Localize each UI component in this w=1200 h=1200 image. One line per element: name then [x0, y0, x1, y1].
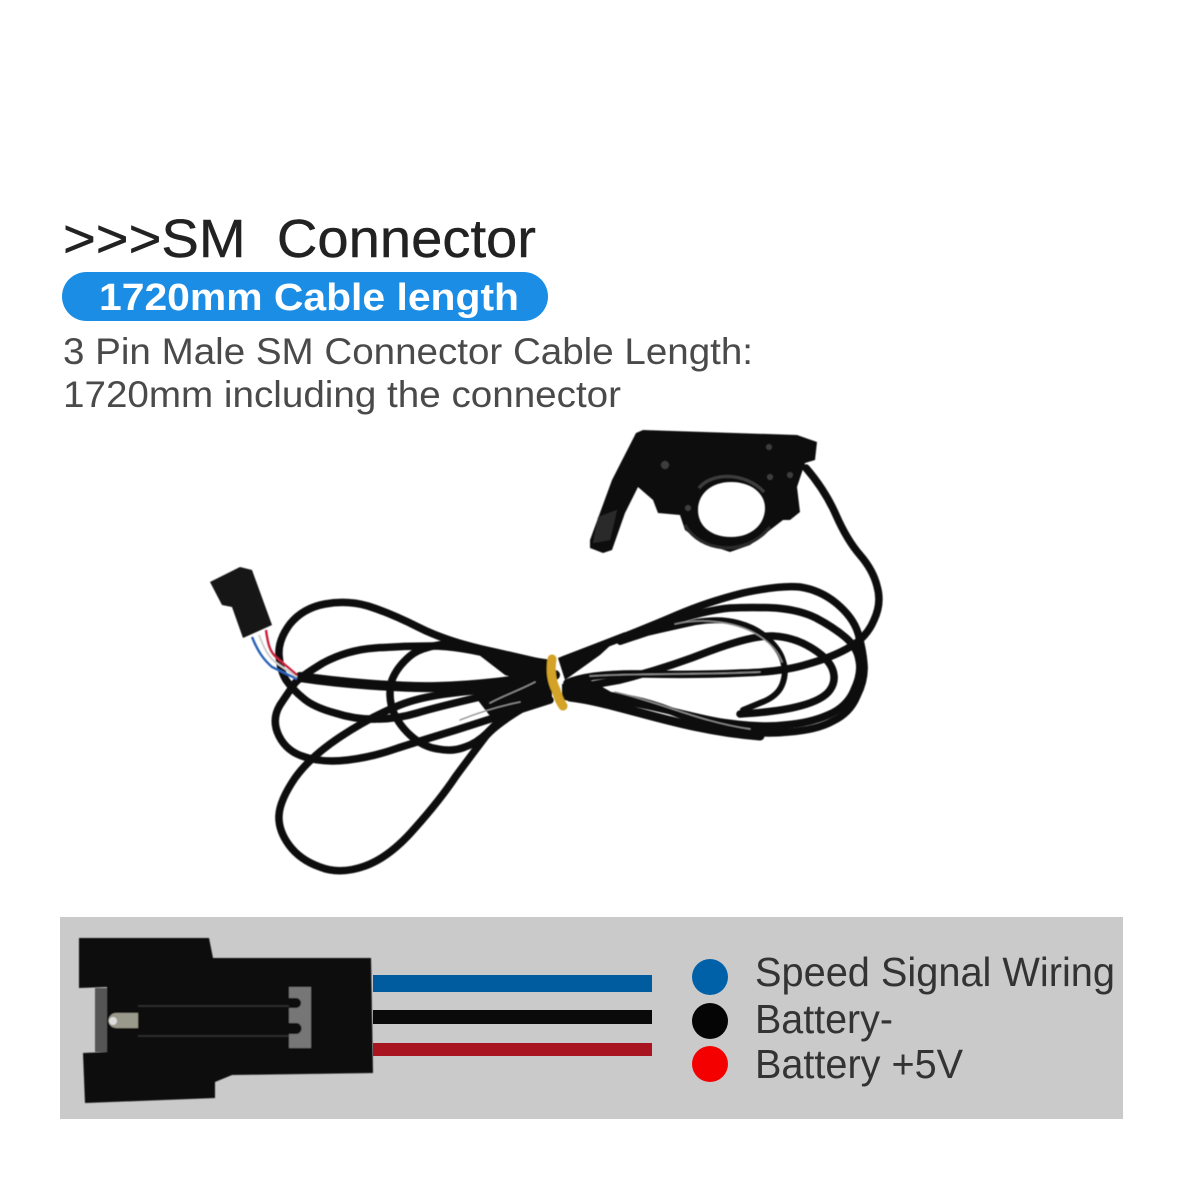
legend: Battery +5V	[755, 1041, 964, 1087]
product photo: throttle with coiled cable	[210, 430, 879, 871]
throttle body	[590, 430, 817, 553]
legend	[692, 949, 1115, 1087]
badge: cable length	[62, 272, 548, 321]
wires	[373, 975, 652, 1056]
rubber band	[551, 659, 563, 706]
cable bundle mass	[470, 632, 625, 716]
panel: connector pinout	[60, 917, 1123, 1119]
description	[63, 331, 753, 415]
connector housing	[79, 938, 373, 1103]
badge: cable length: 1720mm Cable length	[99, 277, 519, 319]
cable highlights	[460, 621, 782, 729]
description: 1720mm including the connector	[63, 374, 621, 415]
title: >>>SM Connector	[63, 209, 536, 269]
coiled cable	[275, 468, 879, 871]
SM connector plug	[210, 567, 297, 679]
legend: Speed Signal Wiring	[755, 949, 1115, 995]
legend: Battery-	[755, 996, 893, 1042]
description: 3 Pin Male SM Connector Cable Length:	[63, 331, 753, 372]
